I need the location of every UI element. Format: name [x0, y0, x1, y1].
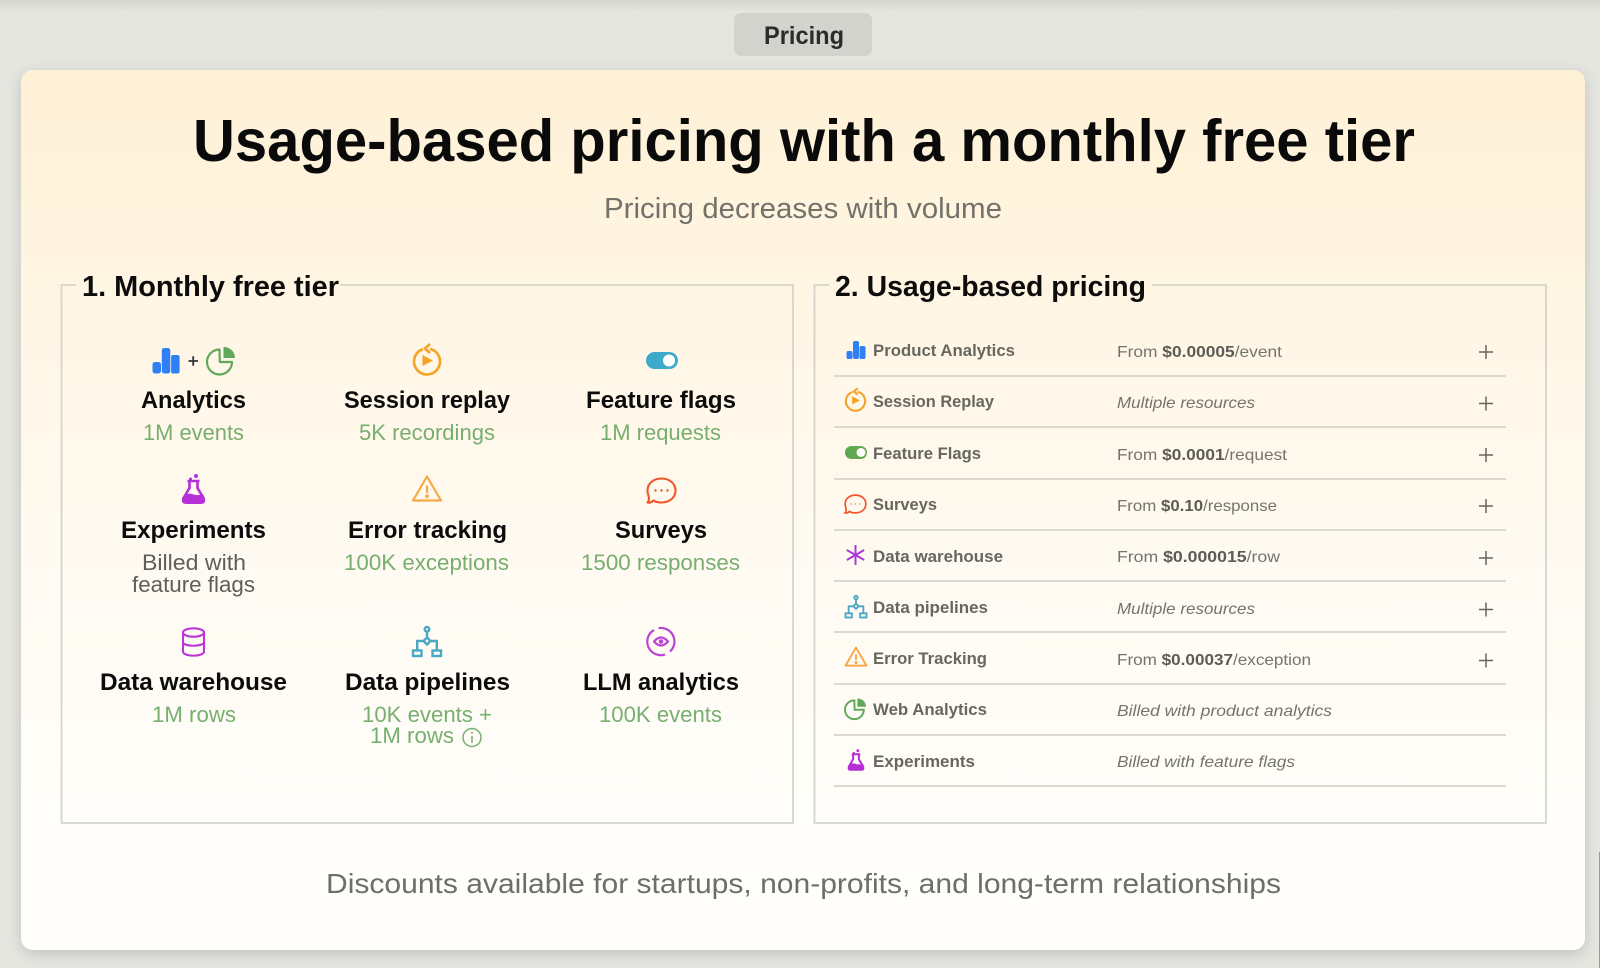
plus sign	[188, 356, 198, 366]
expand control	[1479, 396, 1493, 410]
icon: eye orbit	[647, 628, 674, 655]
icon: pie chart	[845, 698, 866, 719]
item: surveys	[581, 478, 740, 575]
item: experiments: Billed with	[142, 550, 246, 575]
expand control	[1479, 654, 1493, 668]
icon: speech bubble	[648, 478, 676, 503]
heading: usage-based pricing: 2. Usage-based pricing	[835, 271, 1146, 303]
row: experiments: Billed with feature flags	[1117, 754, 1295, 771]
icon: bar chart	[152, 348, 180, 374]
expand control	[1479, 345, 1493, 359]
row: session replay: Multiple resources	[1117, 395, 1255, 412]
row: session replay: Session Replay	[873, 392, 995, 411]
row: data pipelines	[834, 596, 1506, 632]
item: experiments: feature flags	[132, 572, 255, 597]
item: data pipelines	[345, 627, 510, 748]
panel: usage-based pricing	[814, 271, 1546, 823]
item: surveys: 1500 responses	[581, 550, 740, 575]
item: llm analytics: LLM analytics	[583, 669, 739, 696]
panel border: usage pricing	[814, 285, 1546, 823]
item: data pipelines: 10K events +	[362, 702, 492, 727]
row: product analytics: From $0.00005 /event	[1117, 344, 1283, 361]
row: product analytics: Product Analytics	[873, 341, 1015, 360]
icon: warning	[413, 476, 441, 500]
item: data pipelines: Data pipelines	[345, 669, 510, 696]
icon: pipeline	[413, 627, 441, 656]
expand control	[1479, 499, 1493, 513]
icon: toggle	[845, 446, 867, 459]
item: analytics	[141, 347, 246, 445]
icon: pipeline	[846, 596, 866, 618]
item: llm analytics: 100K events	[599, 702, 722, 727]
item: session replay	[344, 344, 511, 445]
heading: monthly free tier: 1. Monthly free tier	[82, 271, 339, 303]
row: web analytics: Billed with product analytics	[1117, 703, 1332, 720]
item: experiments	[121, 474, 266, 597]
row: feature flags	[834, 444, 1506, 479]
row: feature flags: From $0.0001 /request	[1117, 447, 1288, 464]
section tag: Pricing: Pricing	[764, 22, 844, 50]
row: data pipelines: Data pipelines	[873, 598, 988, 617]
expand control	[1479, 602, 1493, 616]
icon: speech bubble	[845, 495, 866, 513]
icon: asterisk	[847, 545, 864, 565]
item: data pipelines: 1M rows	[370, 723, 454, 748]
row: session replay	[834, 388, 1506, 427]
row: surveys	[834, 495, 1506, 530]
item: data warehouse: Data warehouse	[100, 669, 287, 696]
row: error tracking: Error Tracking	[873, 649, 987, 668]
row: data warehouse	[834, 545, 1506, 581]
row: data pipelines: Multiple resources	[1117, 601, 1255, 618]
item: data warehouse	[100, 628, 287, 727]
icon: flask	[848, 749, 864, 771]
item: analytics: Analytics	[141, 387, 246, 414]
item: session replay: 5K recordings	[359, 420, 495, 445]
item: data warehouse: 1M rows	[152, 702, 236, 727]
row: data warehouse: From $0.000015 /row	[1117, 549, 1280, 566]
item: analytics: 1M events	[143, 420, 244, 445]
item: error tracking: Error tracking	[348, 517, 507, 544]
icon: replay	[414, 344, 440, 374]
item: session replay: Session replay	[344, 387, 511, 414]
row: experiments: Experiments	[873, 752, 975, 771]
item: error tracking: 100K exceptions	[344, 550, 509, 575]
icon: info	[463, 728, 481, 746]
expand control	[1479, 448, 1493, 462]
item: feature flags	[586, 352, 736, 445]
item: error tracking	[344, 476, 509, 575]
icon: database	[183, 628, 204, 656]
subtitle: Pricing decreases with volume	[604, 193, 1002, 225]
title: Usage-based pricing with a monthly free tier	[193, 108, 1415, 174]
row: web analytics: Web Analytics	[873, 700, 987, 719]
section tag: Pricing	[734, 13, 872, 56]
row: surveys: From $0.10/response	[1117, 498, 1277, 515]
row: feature flags: Feature Flags	[873, 444, 981, 463]
icon: replay	[846, 388, 865, 411]
panel border: free tier	[62, 285, 793, 823]
icon: toggle	[646, 352, 678, 369]
row: surveys: Surveys	[873, 495, 937, 514]
expand control	[1479, 551, 1493, 565]
item: llm analytics	[583, 628, 739, 727]
row: error tracking	[834, 648, 1506, 684]
row: error tracking: From $0.00037 /exception	[1117, 652, 1311, 669]
item: experiments: Experiments	[121, 517, 266, 544]
row: experiments	[834, 749, 1506, 786]
row: data warehouse: Data warehouse	[873, 547, 1003, 566]
item: feature flags: 1M requests	[600, 420, 721, 445]
panel: monthly free tier	[62, 271, 793, 823]
icon: bars	[846, 341, 866, 359]
icon: warning	[846, 648, 866, 666]
footer note: Discounts available for startups, non-profits, and long-term relationships	[326, 868, 1281, 899]
item: surveys: Surveys	[615, 517, 707, 544]
item: feature flags: Feature flags	[586, 387, 736, 414]
icon: pie chart	[207, 347, 235, 374]
row: web analytics	[834, 698, 1506, 735]
row: product analytics	[834, 341, 1506, 376]
icon: flask	[182, 474, 205, 504]
